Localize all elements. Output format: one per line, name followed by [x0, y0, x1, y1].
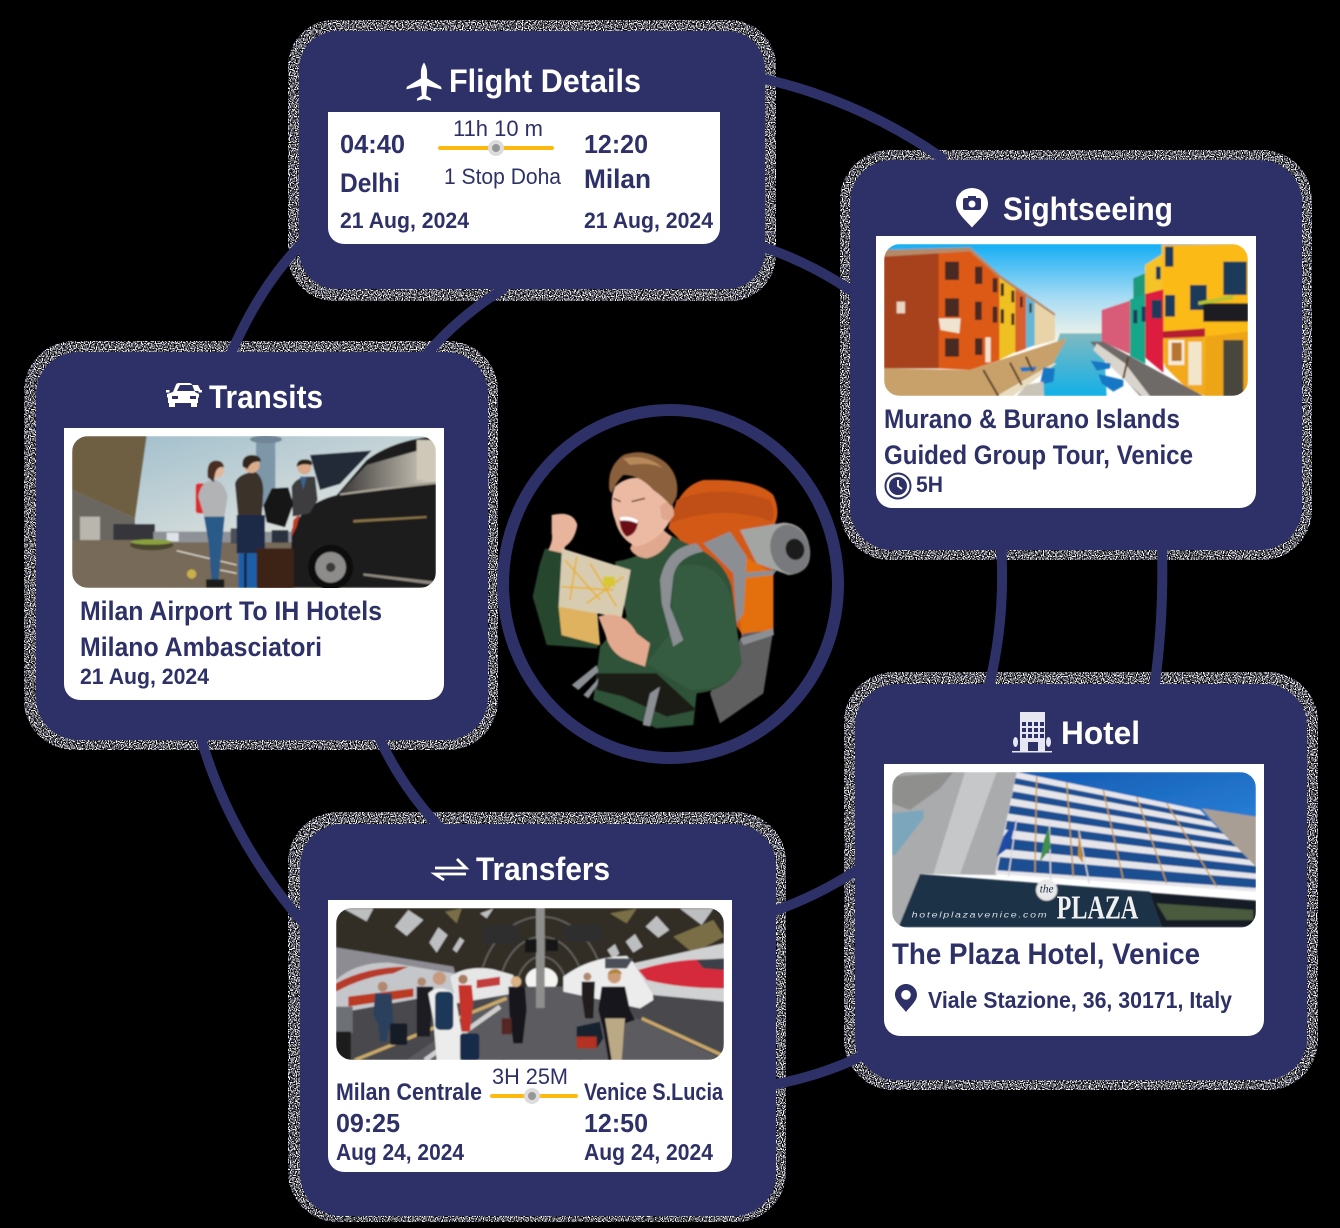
- icon: transfer arrows: [435, 859, 466, 880]
- photo: Milano Centrale station: [336, 908, 724, 1077]
- transfer duration: 3H 25M: [492, 1064, 568, 1089]
- route line with stop marker: [438, 140, 554, 156]
- icon: airplane: [406, 63, 442, 101]
- hotel card: [884, 764, 1264, 1036]
- icon: hotel building: [1012, 712, 1052, 752]
- photo: The Plaza Hotel facade: hotelplazavenice.com: [912, 909, 1048, 919]
- origin city: Delhi: [340, 168, 400, 198]
- photo: The Plaza Hotel facade: the: [1040, 884, 1054, 896]
- hotel name: The Plaza Hotel, Venice: [892, 938, 1200, 971]
- origin station: Milan Centrale: [336, 1079, 482, 1106]
- icon: clock: [886, 474, 910, 498]
- heading: Sightseeing: Sightseeing: [1003, 191, 1173, 227]
- route line marker: [490, 1088, 578, 1104]
- icon: car: [166, 383, 202, 407]
- tour duration: 5H: [916, 472, 943, 497]
- transit date: 21 Aug, 2024: [80, 664, 210, 689]
- departure date: 21 Aug, 2024: [340, 208, 470, 233]
- photo: airport car transfer: [72, 435, 436, 590]
- photo: The Plaza Hotel facade: [892, 772, 1256, 927]
- panel: flight details: [288, 20, 776, 301]
- transfer card: [328, 900, 732, 1172]
- attraction title: Guided Group Tour, Venice: [884, 440, 1193, 470]
- flight duration: 11h 10 m: [453, 116, 543, 141]
- panel: transfers: [288, 812, 786, 1222]
- arrival time: 12:20: [584, 129, 648, 159]
- flight info card: [328, 112, 720, 244]
- panel: sightseeing: [840, 150, 1312, 560]
- panel: hotel: [844, 672, 1318, 1090]
- departure time: 09:25: [336, 1108, 400, 1138]
- central traveller circle: [503, 410, 838, 758]
- heading: Hotel: Hotel: [1061, 715, 1140, 751]
- transfer title: Milano Ambasciatori: [80, 632, 322, 662]
- illustration: backpacker with map: [533, 452, 815, 728]
- heading: Transits: Transits: [209, 379, 323, 415]
- transit card: [64, 428, 444, 700]
- stop label: 1 Stop Doha: [444, 164, 562, 189]
- transfer title: [80, 596, 382, 662]
- arrival date: 21 Aug, 2024: [584, 208, 714, 233]
- arrival date: Aug 24, 2024: [584, 1139, 713, 1165]
- departure time: 04:40: [340, 129, 405, 159]
- heading: Transfers: Transfers: [476, 851, 610, 887]
- destination station: Venice S.Lucia: [584, 1079, 724, 1106]
- photo: The Plaza Hotel facade: PLAZA: [1057, 889, 1138, 926]
- panel: transits: [24, 341, 498, 750]
- connectors between panels: [200, 78, 1162, 1085]
- attraction title: Murano & Burano Islands: [884, 404, 1180, 434]
- attraction title: [884, 404, 1193, 470]
- arrival time: 12:50: [584, 1108, 648, 1138]
- heading: Flight Details: Flight Details: [449, 63, 641, 99]
- icon: camera location pin: [956, 188, 988, 228]
- departure date: Aug 24, 2024: [336, 1139, 464, 1165]
- sightseeing card: [876, 236, 1256, 508]
- hotel address: Viale Stazione, 36, 30171, Italy: [928, 987, 1232, 1013]
- destination city: Milan: [584, 164, 651, 194]
- transfer title: Milan Airport To IH Hotels: [80, 596, 382, 626]
- photo: Burano canal: [884, 244, 1248, 396]
- icon: location pin: [895, 984, 917, 1012]
